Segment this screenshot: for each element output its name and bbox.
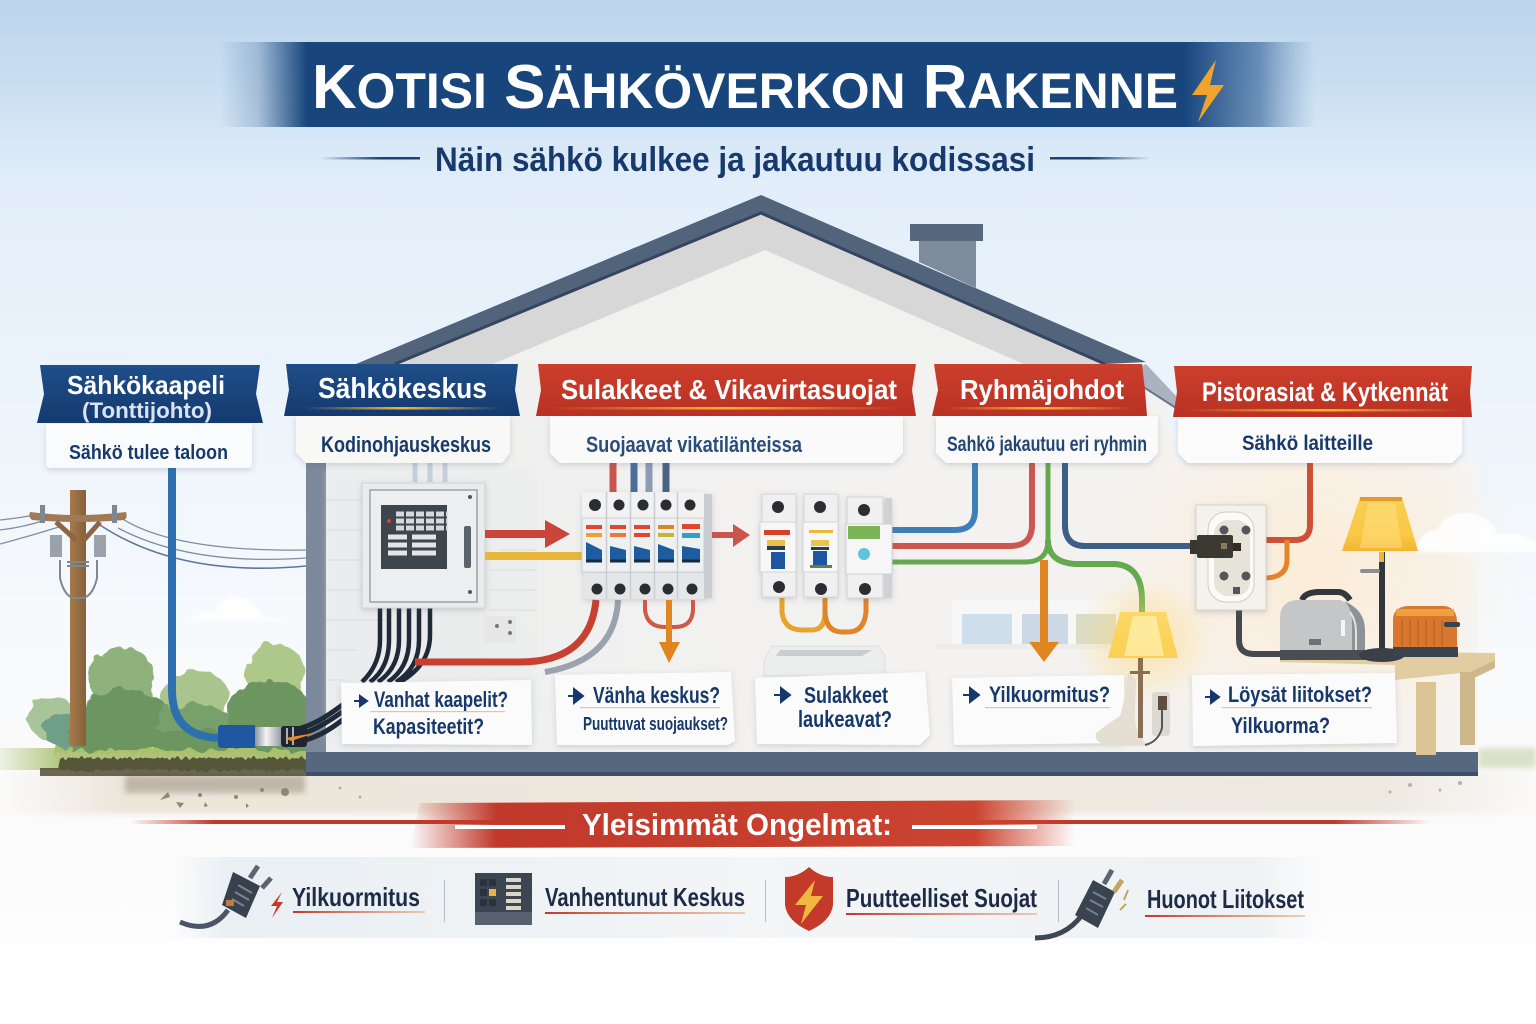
distribution panel <box>362 483 485 608</box>
callout: Vanhat kaapelit: Vanhat kaapelit? <box>374 687 508 712</box>
wire: red to callout <box>415 600 618 672</box>
wall outlet <box>1190 463 1310 654</box>
callout: Vanha keskus: Puuttuvat suojaukset? <box>583 714 728 734</box>
callout: Sulakkeet laukeavat: laukeavat? <box>798 706 892 732</box>
breaker block two <box>760 494 892 598</box>
step 5 heading: Pistorasiat and Kytkennat: Pistorasiat & Kytkennät <box>1202 377 1448 407</box>
toaster silver <box>1280 592 1365 660</box>
toaster orange <box>1393 606 1460 657</box>
lamp glow <box>1073 578 1213 702</box>
orange loop wires <box>782 598 866 632</box>
step 1 heading: Sahkokaapeli: Sähkökaapeli <box>67 370 225 400</box>
output wires <box>892 463 1190 612</box>
low cabinet behind callout <box>764 646 885 676</box>
step 1 heading: Sahkokaapeli <box>37 365 263 468</box>
callout: Loysat liitokset <box>1192 673 1397 746</box>
step 3 heading: Sulakkeet and Vikavirtasuojat: Sulakkeet & Vikavirtasuojat <box>561 374 897 405</box>
house base <box>306 752 1478 776</box>
subtitle: Näin sähkö kulkee ja jakautuu kodissasi <box>435 141 1035 179</box>
step 5 heading: Pistorasiat and Kytkennat <box>1173 366 1472 463</box>
problem: Huonot Liitokset: Huonot Liitokset <box>1147 884 1304 914</box>
step 5 heading: Pistorasiat and Kytkennat: Sähkö laitteille <box>1242 432 1373 455</box>
callout: Vanhat kaapelit <box>341 680 532 745</box>
divider <box>1058 880 1059 922</box>
small wall socket <box>484 612 536 642</box>
power pole <box>29 490 127 746</box>
step 3 heading: Sulakkeet and Vikavirtasuojat <box>536 364 916 463</box>
divider <box>765 880 766 922</box>
section heading: common problems: Yleisimmät Ongelmat: <box>582 807 892 842</box>
arrow: red between breakers <box>712 524 750 547</box>
step 4 heading: Ryhmajohdot: Sahkö jakautuu eri ryhmin <box>947 433 1147 456</box>
wire: yellow feed <box>485 552 583 560</box>
problem: Puutteelliset Suojat: Puutteelliset Suojat <box>846 883 1037 913</box>
icon: shield with bolt <box>785 867 833 931</box>
wires to breaker block <box>613 463 666 492</box>
callout: Vanha keskus <box>555 672 735 745</box>
breaker block one <box>582 492 712 599</box>
roof <box>356 195 1176 408</box>
divider <box>444 880 445 922</box>
chimney <box>910 224 983 288</box>
callout: Ylikuormitus <box>952 675 1125 745</box>
bushes <box>28 644 312 751</box>
title banner <box>220 42 1315 127</box>
icon: title lightning bolt <box>1192 60 1224 122</box>
house walls <box>306 213 1525 763</box>
callout: Sulakkeet laukeavat: Sulakkeet <box>804 682 888 708</box>
floor lamp left <box>1096 612 1178 746</box>
section heading: common problems <box>130 800 1430 848</box>
panel wires in from top <box>415 463 445 482</box>
table <box>1280 652 1495 755</box>
callout: Loysat liitokset: Löysät liitokset? <box>1228 682 1372 707</box>
step 3 heading: Sulakkeet and Vikavirtasuojat: Suojaavat vikatilänteissa <box>586 432 803 457</box>
clouds <box>190 513 1536 620</box>
window <box>936 600 1122 649</box>
arrow: red feed <box>485 520 570 548</box>
ground and grass <box>0 745 1536 814</box>
callout: Loysat liitokset: Yilkuorma? <box>1231 713 1330 738</box>
step 4 heading: Ryhmajohdot: Ryhmäjohdot <box>960 374 1124 405</box>
icon: loose plug <box>1035 870 1128 938</box>
step 1 heading: Sahkokaapeli: Sähkö tulee taloon <box>69 442 228 464</box>
step 2 heading: Sahkokeskus: Sähkökeskus <box>318 373 487 405</box>
icon: old panel <box>475 873 532 925</box>
step 2 heading: Sahkokeskus <box>284 364 520 463</box>
title banner: KOTISI SÄHKÖVERKON RAKENNE <box>312 53 1178 122</box>
step 2 heading: Sahkokeskus: Kodinohjauskeskus <box>321 432 491 457</box>
arrow: orange down from breakers <box>659 600 680 663</box>
callout: Ylikuormitus: Yilkuormitus? <box>989 682 1110 707</box>
power lines <box>0 514 306 568</box>
step 4 heading: Ryhmajohdot <box>932 364 1158 463</box>
callout: Vanhat kaapelit: Kapasiteetit? <box>373 714 484 739</box>
problem strip background <box>170 857 1330 938</box>
wires under breaker block <box>645 600 693 627</box>
callout: Vanha keskus: Vänha keskus? <box>593 682 720 708</box>
wires from distribution panel to callout <box>362 608 430 682</box>
problem: Vanhentunut Keskus: Vanhentunut Keskus <box>545 882 745 912</box>
arrow: orange down from group wires <box>1029 560 1059 662</box>
icon: overloaded plug <box>180 866 283 926</box>
blue service cable <box>172 468 345 748</box>
problem: Ylikuormitus: Yilkuormitus <box>292 882 420 912</box>
callout: Sulakkeet laukeavat <box>755 672 930 745</box>
step 1 heading: Sahkokaapeli: (Tonttijohto) <box>82 398 212 423</box>
floor lamp right <box>1342 497 1418 662</box>
